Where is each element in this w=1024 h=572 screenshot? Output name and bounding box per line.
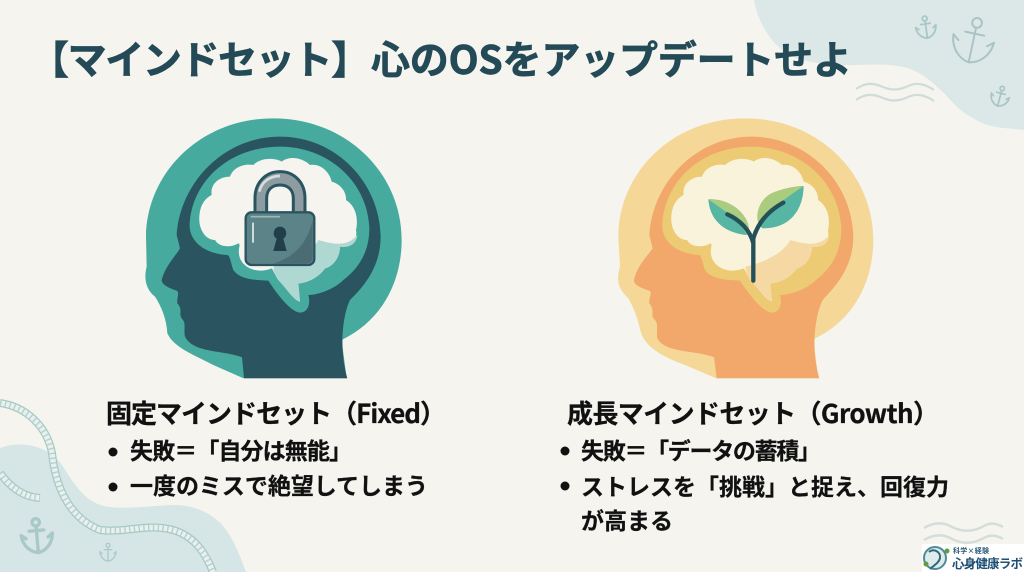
heading: growth mindset: 成長マインドセット（Growth） [567, 394, 939, 431]
bullet list: growth mindset [560, 432, 949, 536]
sprout [708, 186, 804, 281]
bullet list: growth mindset: ストレスを「挑戦」と捉え、回復力 [581, 468, 949, 502]
head orange silhouette [634, 137, 853, 378]
title: 【マインドセット】 [30, 30, 370, 86]
bullet list: fixed mindset: 一度のミスで絶望してしまう [130, 467, 428, 501]
bullet list: fixed mindset [108, 432, 428, 501]
decoration: top right wave blob [754, 0, 1024, 130]
decoration: bottom right waves [924, 523, 1003, 543]
head outer cream halo [618, 118, 873, 378]
heading: fixed mindset: 固定マインドセット（Fixed） [106, 394, 446, 431]
brain peach lower lobe [745, 235, 829, 302]
decoration: bottom left wave blob with rope and anchors [0, 403, 246, 572]
logo: 心身健康ラボ [922, 544, 1024, 572]
bullet list: growth mindset: 失敗＝「データの蓄積」 [581, 432, 821, 466]
logo name: 心身健康ラボ [952, 553, 1023, 572]
brain cream cloud [671, 158, 829, 302]
brain white cloud [199, 158, 357, 302]
panel: fixed mindset text [106, 394, 446, 501]
illustration: growth mindset head with sprout [618, 118, 873, 378]
logo tagline: 科学×経験 [953, 546, 989, 556]
brain yellow band [662, 147, 841, 313]
brain light lower lobe [273, 235, 357, 302]
head outer teal halo [145, 118, 402, 378]
bullet list: fixed mindset: 失敗＝「自分は無能」 [130, 432, 352, 466]
illustration: fixed mindset head with padlock [145, 118, 402, 378]
padlock [246, 172, 314, 265]
bullet list: growth mindset: が高まる [581, 502, 673, 536]
title [30, 30, 852, 86]
title: 心のOSをアップデートせよ [371, 30, 852, 86]
logo icon [924, 547, 950, 569]
panel: growth mindset text [560, 394, 949, 536]
head dark silhouette [162, 137, 381, 378]
brain teal band [190, 147, 369, 313]
